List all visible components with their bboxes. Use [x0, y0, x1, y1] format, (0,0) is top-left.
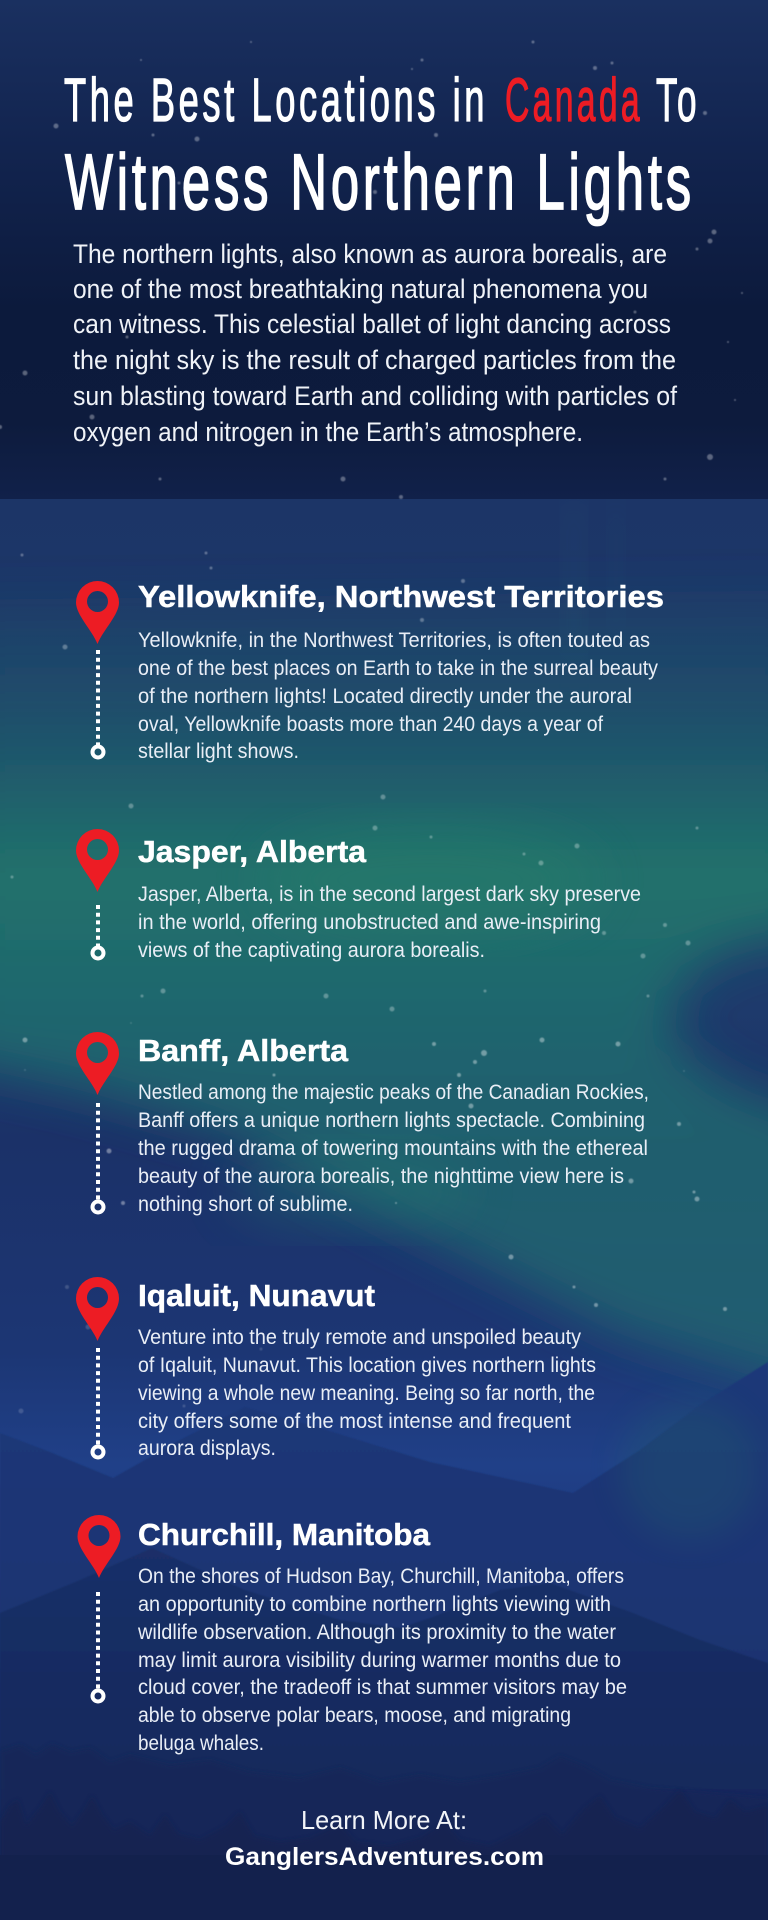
body text: stellar light shows.	[138, 740, 299, 763]
body text: Venture into the truly remote and unspoiled beauty	[138, 1326, 581, 1349]
icon: map pin with dotted route	[76, 1277, 119, 1458]
icon: map pin with dotted route	[76, 581, 119, 758]
body text	[138, 1326, 596, 1460]
background: aurora sky and mountains	[0, 499, 768, 1920]
body text: oval, Yellowknife boasts more than 240 days a year of	[138, 713, 603, 736]
icon: map pin with dotted route	[76, 1032, 119, 1212]
panel: dark header background	[0, 0, 768, 499]
body text	[137, 1565, 627, 1755]
body text: may limit aurora visibility during warmer months due to	[138, 1649, 621, 1672]
intro paragraph: the night sky is the result of charged particles from the	[73, 345, 676, 375]
footer call to action	[225, 1805, 544, 1871]
intro paragraph: can witness. This celestial ballet of light dancing across	[73, 309, 671, 339]
stars	[0, 40, 743, 1414]
body text: an opportunity to combine northern lights viewing with	[138, 1593, 611, 1616]
intro paragraph: one of the most breathtaking natural phenomena you	[73, 274, 648, 304]
body text	[138, 883, 641, 962]
panel: Banff	[76, 1032, 649, 1216]
panel: Iqaluit	[76, 1277, 596, 1460]
heading: Yellowknife, Northwest Territories	[138, 579, 664, 614]
body text: viewing a whole new meaning. Being so far north, the	[138, 1382, 595, 1405]
body text: of Iqaluit, Nunavut. This location gives northern lights	[138, 1354, 596, 1377]
mountain range: middle	[0, 1548, 768, 1920]
body text: Yellowknife, in the Northwest Territories, is often touted as	[138, 629, 650, 652]
body text: able to observe polar bears, moose, and migrating	[138, 1704, 571, 1727]
body text: wildlife observation. Although its proximity to the water	[137, 1621, 616, 1644]
icon: map pin with dotted route	[76, 829, 119, 958]
body text: city offers some of the most intense and frequent	[138, 1410, 571, 1433]
tree line: near	[0, 1790, 768, 1920]
heading: Banff, Alberta	[138, 1033, 349, 1068]
panel: Yellowknife	[76, 579, 664, 763]
tree line: hazy	[0, 1744, 768, 1920]
body text: of the northern lights! Located directly under the auroral	[138, 685, 632, 708]
body text: one of the best places on Earth to take in the surreal beauty	[138, 657, 658, 680]
title	[64, 66, 700, 226]
aurora band	[0, 499, 768, 1400]
panel: Jasper	[76, 829, 641, 962]
title line 1: The Best Locations in	[64, 66, 488, 134]
body text: in the world, offering unobstructed and awe-inspiring	[138, 911, 601, 934]
intro paragraph: The northern lights, also known as aurora borealis, are	[73, 239, 667, 269]
heading: Iqaluit, Nunavut	[138, 1278, 375, 1313]
body text: cloud cover, the tradeoff is that summer visitors may be	[138, 1676, 627, 1699]
mountain range: far	[0, 1362, 768, 1920]
intro paragraph: sun blasting toward Earth and colliding with particles of	[73, 381, 678, 411]
title line 1: Canada	[505, 66, 643, 134]
icon: map pin with dotted route	[78, 1515, 120, 1702]
body text: the rugged drama of towering mountains with the ethereal	[138, 1137, 648, 1160]
website: GanglersAdventures.com	[225, 1843, 544, 1871]
body text: views of the captivating aurora borealis.	[138, 939, 485, 962]
body text: beluga whales.	[138, 1732, 264, 1755]
title line 1: To	[656, 66, 700, 134]
body text: beauty of the aurora borealis, the nighttime view here is	[138, 1165, 624, 1188]
body text: nothing short of sublime.	[138, 1193, 353, 1216]
body text	[138, 629, 658, 763]
body text: aurora displays.	[138, 1437, 276, 1460]
body text	[138, 1081, 649, 1216]
intro paragraph	[73, 239, 678, 447]
body text: Nestled among the majestic peaks of the Canadian Rockies,	[138, 1081, 649, 1104]
aurora glow over range	[620, 1400, 760, 1540]
panel: Churchill	[78, 1515, 627, 1755]
body text: Jasper, Alberta, is in the second largest dark sky preserve	[138, 883, 641, 906]
intro paragraph: oxygen and nitrogen in the Earth’s atmosphere.	[73, 417, 583, 447]
learn more label: Learn More At:	[301, 1805, 467, 1835]
heading: Churchill, Manitoba	[138, 1517, 431, 1552]
heading: Jasper, Alberta	[138, 834, 367, 869]
body text: On the shores of Hudson Bay, Churchill, Manitoba, offers	[138, 1565, 624, 1588]
body text: Banff offers a unique northern lights spectacle. Combining	[138, 1109, 645, 1132]
